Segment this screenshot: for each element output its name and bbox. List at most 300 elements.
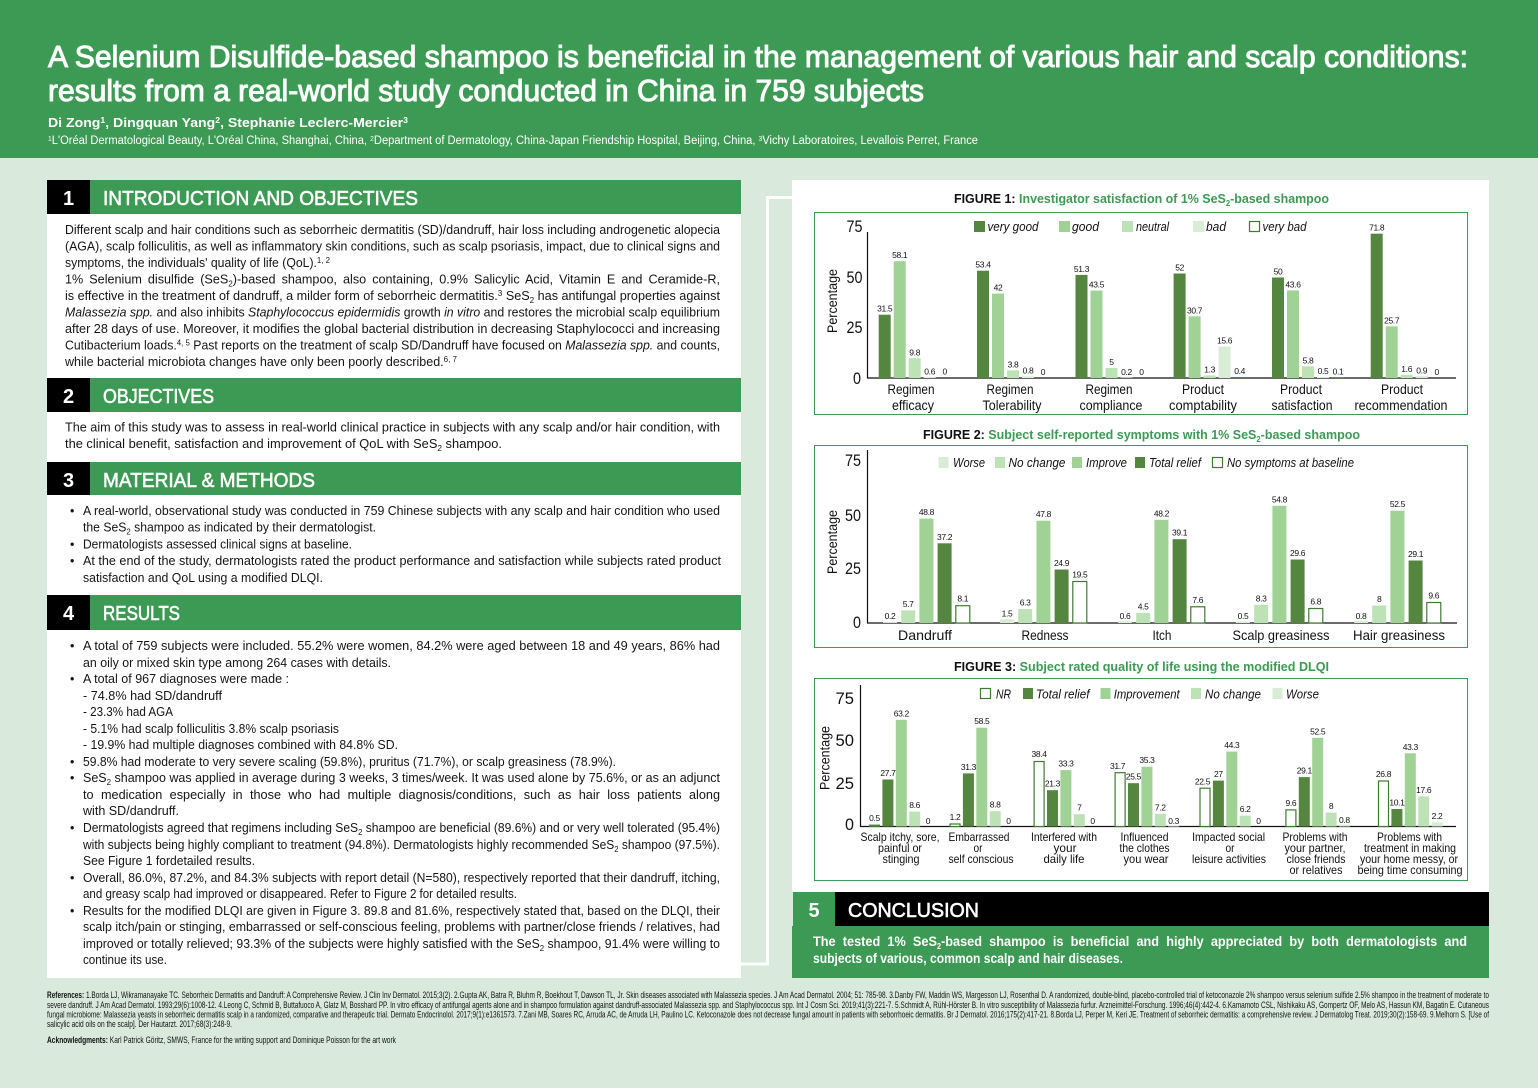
conclusion text: 2 [937, 942, 942, 951]
figure 2 title: -based shampoo [1261, 427, 1360, 442]
affiliations: L'Oréal Dermatological Beauty, L'Oréal China, Shanghai, China, [52, 135, 370, 147]
section 1 text: 1% Selenium disulfide (SeS [65, 272, 227, 286]
category labels: Product [1280, 381, 1322, 397]
section 2 text: the clinical benefit, satisfaction and improvement of QoL with SeS [65, 437, 427, 451]
product recommendation bars: 71.8 [1369, 223, 1385, 233]
category labels: comptability [1169, 397, 1237, 413]
section 3 text: shampoo as indicated by their dermatologist. [131, 520, 376, 534]
treatment bars: 26.8 [1376, 769, 1392, 779]
figure 3 title: FIGURE 3: Subject rated quality of life using the modified DLQI [954, 659, 1329, 674]
product satisfaction bars: 0.1 [1333, 366, 1344, 376]
clothes bars: 31.7 [1110, 761, 1126, 771]
legend: good [1072, 219, 1100, 234]
category labels: Scalp itchy, sore, [860, 830, 940, 844]
y axis labels: 25 [836, 774, 854, 793]
y axis labels: 0 [853, 369, 861, 388]
product compatibility bars: 15.6 [1217, 336, 1233, 346]
category labels: you wear [1124, 852, 1168, 866]
scalp greasiness bars: 8.3 [1256, 593, 1267, 603]
redness bars: 24.9 [1054, 558, 1070, 568]
legend: Improvement [1114, 686, 1181, 702]
category labels: Tolerability [982, 397, 1042, 413]
category labels: Interfered with [1031, 830, 1097, 844]
section 3 text: the SeS [83, 520, 127, 534]
social activities bars: 22.5 [1195, 776, 1211, 786]
treatment bars [1376, 742, 1443, 826]
itch bars: 48.2 [1154, 508, 1170, 518]
itch bars: 39.1 [1172, 528, 1188, 538]
section 1 text: symptoms, the individuals' quality of life (QoL). [65, 256, 322, 270]
category labels: Impacted social [1192, 830, 1265, 844]
regimen compliance bars: 51.3 [1074, 264, 1090, 274]
section 4 text: • [70, 672, 74, 686]
category labels: Regimen [1086, 381, 1132, 397]
clothes bars: 0.3 [1168, 816, 1180, 826]
affiliations: 2 [370, 136, 374, 143]
section 1 text: has antifungal properties against [534, 289, 721, 303]
section 1 text: 6, 7 [444, 355, 458, 364]
y axis labels: 0 [853, 613, 861, 632]
product recommendation bars [1369, 223, 1440, 378]
authors: , Dingquan Yang [105, 115, 215, 130]
scalp greasiness bars: 0.5 [1238, 611, 1249, 621]
section 1 text: 4, 5 [177, 338, 190, 348]
section 1 text: SeS [502, 289, 530, 303]
category labels: Regimen [986, 381, 1034, 397]
section 3 text: At the end of the study, dermatologists rated the product performance and satisfaction while subjects rated product [83, 554, 722, 568]
section 4 text: SeS [83, 771, 107, 785]
section 3 text [70, 504, 722, 585]
section 4 text: - 5.1% had scalp folliculitis 3.8% scalp psoriasis [83, 722, 339, 736]
section 1 text: 2 [228, 280, 233, 288]
scalp greasiness bars [1236, 494, 1323, 623]
product satisfaction bars: 0.5 [1318, 366, 1329, 376]
affiliations: Vichy Laboratoires, Levallois Perret, France [762, 135, 978, 147]
redness bars [1000, 509, 1088, 623]
dandruff bars: 5.7 [903, 599, 914, 609]
y axis labels [816, 689, 854, 834]
y axis labels: 50 [836, 731, 854, 750]
social activities bars: 6.2 [1240, 804, 1251, 814]
right figures panel [792, 180, 1489, 892]
y axis labels: 25 [845, 559, 861, 578]
section 4 text: to medication especially in those who had multiple diagnosis/conditions, such as hair loss patients along [83, 788, 720, 802]
section 4 text: A total of 759 subjects were included. 55.2% were women, 84.2% were aged between 18 and 49 years, 86% had [83, 639, 720, 653]
category labels: stinging [882, 852, 920, 866]
product compatibility bars [1174, 262, 1246, 378]
section 4 text: • [70, 821, 74, 835]
hair greasiness bars: 52.5 [1390, 499, 1406, 509]
section 3 text: satisfaction and QoL using a modified DLQI. [83, 571, 323, 585]
category labels: Product [1182, 381, 1224, 397]
section 4 heading: RESULTS [103, 603, 180, 625]
dandruff bars [883, 507, 970, 623]
itch bars: 4.5 [1138, 601, 1149, 611]
category labels: or [974, 841, 983, 855]
section 4 text: A total of 967 diagnoses were made : [83, 672, 289, 686]
category labels: compliance [1080, 397, 1143, 413]
conclusion panel: 5 [808, 900, 820, 922]
product recommendation bars: 0.9 [1416, 366, 1428, 376]
interfered bars: 7 [1077, 803, 1082, 813]
section 2 text: The aim of this study was to assess in real-world clinical practice in subjects with any scalp and/or hair condition, with [65, 420, 720, 434]
section 3 text: • [70, 554, 74, 568]
section 4 text: • [70, 771, 74, 785]
legend: very good [988, 219, 1039, 234]
embarrassed bars: 58.5 [974, 716, 990, 726]
section 4 text: • [70, 871, 74, 885]
section 1 text: after 28 days of use. Moreover, it modifies the global bacterial distribution in decreasing Staphylococci and increasing [65, 322, 720, 336]
section 3 text: Dermatologists assessed clinical signs at baseline. [83, 538, 352, 552]
title [48, 40, 1468, 108]
conclusion panel: CONCLUSION [848, 900, 979, 922]
regimen tolerability bars [975, 260, 1046, 378]
product satisfaction bars: 50 [1274, 266, 1283, 276]
figure 2 title: FIGURE 2: Subject self-reported symptoms with 1% SeS [923, 427, 1267, 442]
section 1 text: 3 [498, 289, 503, 298]
legend: bad [1206, 219, 1227, 234]
section 4 text: - 74.8% had SD/dandruff [83, 689, 223, 703]
category labels: Dandruff [898, 627, 952, 643]
legend: very bad [1262, 219, 1307, 234]
scalp itchy bars: 27.7 [880, 768, 896, 778]
category labels [898, 627, 1445, 643]
embarrassed bars: 8.8 [990, 800, 1001, 810]
section 1 text: 1, 2 [317, 256, 331, 265]
section 4 heading [47, 595, 741, 630]
legend: Improve [1086, 455, 1127, 470]
interfered bars: 0 [1090, 816, 1095, 826]
figure 1 title: -based shampoo [1230, 191, 1329, 206]
social activities bars: 44.3 [1224, 740, 1240, 750]
affiliations: 3 [759, 136, 762, 143]
connector line between panels [741, 198, 792, 964]
section 4 text: 2 [540, 944, 545, 953]
redness bars: 6.3 [1020, 598, 1031, 608]
section 4 text: with subjects being highly compliant to treatment (94.8%). Dermatologists highly recommended SeS [83, 838, 636, 852]
regimen tolerability bars: 53.4 [975, 260, 991, 270]
section 1 text: Malassezia spp. and counts, [565, 338, 721, 352]
hair greasiness bars: 8 [1377, 594, 1382, 604]
category labels: treatment in making [1364, 841, 1456, 855]
section 4 text: and greasy scalp had improved or disappeared. Refer to Figure 2 for detailed results. [83, 887, 517, 901]
section 3 heading: MATERIAL & METHODS [103, 470, 315, 492]
legend: No change [1008, 455, 1066, 470]
dandruff bars: 0.2 [885, 611, 896, 621]
product compatibility bars: 52 [1175, 262, 1185, 272]
scalp greasiness bars: 54.8 [1272, 494, 1288, 504]
category labels: or [1226, 841, 1235, 855]
scalp itchy bars [869, 708, 931, 826]
section 4 text: shampoo (97.5%). [619, 838, 720, 852]
regimen efficacy bars: 0 [943, 366, 948, 376]
regimen efficacy bars: 9.8 [909, 347, 921, 357]
section 2 heading: 2 [63, 386, 74, 408]
category labels [888, 381, 1448, 413]
category labels: daily life [1044, 852, 1085, 866]
section 1 text [64, 223, 721, 369]
treatment bars: 17.6 [1416, 785, 1432, 795]
clothes bars: 7.2 [1155, 802, 1166, 812]
section 4 text: Dermatologists agreed that regimens including SeS [83, 821, 368, 835]
section 3 heading: 3 [63, 470, 74, 492]
category labels: leisure activities [1192, 852, 1266, 866]
section 4 text: shampoo, 91.4% were willing to [544, 937, 720, 951]
section 4 text: • [70, 904, 74, 918]
section 3 heading [47, 462, 741, 495]
category labels: Embarrassed [948, 830, 1010, 844]
regimen tolerability bars: 0.8 [1023, 366, 1034, 376]
figure 2 bar chart [814, 446, 1468, 648]
section 4 text: 59.8% had moderate to very severe scaling (59.8%), pruritus (71.7%), or scalp greasiness (78.9%). [83, 755, 616, 769]
section 4 text: - 23.3% had AGA [83, 705, 174, 719]
category labels: your partner, [1284, 841, 1346, 855]
section 1 heading: INTRODUCTION AND OBJECTIVES [103, 188, 418, 210]
interfered bars: 21.3 [1045, 779, 1061, 789]
category labels: Product [1381, 381, 1423, 397]
interfered bars [1032, 749, 1095, 826]
acknowledgments: Acknowledgments: Karl Patrick Göritz, SMWS, France for the writing support and Dominique Poisson for the art work [47, 1035, 396, 1046]
legend: neutral [1136, 219, 1170, 234]
product satisfaction bars: 43.6 [1285, 279, 1301, 289]
hair greasiness bars: 0.8 [1356, 611, 1367, 621]
redness bars: 47.8 [1036, 509, 1052, 519]
conclusion text: The tested 1% SeS [813, 933, 950, 949]
category labels: self conscious [948, 852, 1014, 866]
treatment bars: 43.3 [1403, 742, 1418, 752]
legend: No change [1205, 686, 1261, 702]
section 3 text: • [70, 504, 74, 518]
hair greasiness bars [1354, 499, 1441, 623]
section 2 heading: OBJECTIVES [103, 386, 214, 408]
treatment bars: 2.2 [1432, 811, 1443, 821]
regimen compliance bars: 5 [1109, 357, 1114, 367]
section 4 text: shampoo was applied in average during 3 weeks, 3 times/week. It was used alone by 75.6%, or as an adjunct [111, 771, 721, 785]
figure 2 title: 2 [1256, 435, 1261, 444]
section 4 text: • [70, 755, 74, 769]
product compatibility bars: 1.3 [1204, 364, 1216, 374]
header banner [0, 0, 1538, 158]
figure 1 title: FIGURE 1: Investigator satisfaction of 1% SeS [954, 191, 1235, 206]
clothes bars [1110, 755, 1180, 826]
section 4 text: shampoo are beneficial (89.6%) and or very well tolerated (95.4%) [362, 821, 720, 835]
partner bars: 29.1 [1297, 766, 1312, 776]
section 1 text: is effective in the treatment of dandruff, a milder form of seborrheic dermatitis. [65, 289, 494, 303]
y axis labels: 75 [846, 217, 862, 236]
scalp itchy bars: 63.2 [894, 708, 909, 718]
y axis labels: 75 [845, 451, 861, 470]
clothes bars: 25.5 [1126, 772, 1142, 782]
legend [938, 455, 1354, 470]
product recommendation bars: 1.6 [1401, 364, 1413, 374]
authors: 2 [215, 116, 221, 125]
scalp itchy bars: 0.5 [869, 813, 880, 823]
category labels: satisfaction [1272, 397, 1332, 413]
section 1 heading: 1 [63, 188, 74, 210]
y axis labels: 75 [836, 689, 854, 708]
partner bars: 9.6 [1286, 798, 1297, 808]
category labels: your [1054, 841, 1077, 855]
references: salicylic acid oils on the scalp]. Der Hautarzt. 2017;68(3):248-9. [47, 1019, 232, 1030]
section 1 text: Malassezia spp. and also inhibits Staphylococcus epidermidis growth in vitro and restores the microbial scalp equilibrium [65, 306, 720, 320]
regimen compliance bars: 43.5 [1089, 280, 1105, 290]
y axis labels: 25 [846, 318, 862, 337]
partner bars: 8 [1329, 801, 1334, 811]
category labels: Scalp greasiness [1232, 627, 1330, 643]
section 3 text: 2 [126, 528, 131, 536]
dandruff bars: 8.1 [957, 594, 969, 604]
references [47, 990, 1489, 1030]
regimen efficacy bars: 58.1 [892, 250, 908, 260]
section 2 text: shampoo. [442, 437, 502, 451]
section 3 text: • [70, 538, 74, 552]
interfered bars: 38.4 [1032, 749, 1047, 759]
section 1 text: )-based shampoo, also containing, 0.9% Salicylic Acid, Vitamin E and Ceramide-R, [233, 272, 720, 286]
itch bars [1118, 508, 1205, 623]
regimen tolerability bars: 3.8 [1008, 359, 1019, 369]
product compatibility bars: 0.4 [1234, 366, 1246, 376]
conclusion panel [792, 892, 1489, 978]
category labels: Itch [1152, 627, 1172, 643]
authors: , Stephanie Leclerc-Mercier [220, 115, 403, 130]
itch bars: 0.6 [1120, 611, 1131, 621]
category labels: Redness [1022, 627, 1068, 643]
regimen efficacy bars: 31.5 [877, 304, 893, 314]
legend [974, 219, 1307, 234]
y axis labels: 50 [846, 268, 862, 287]
legend: NR [996, 686, 1011, 702]
affiliations: Department of Dermatology, China-Japan Friendship Hospital, Beijing, China, [374, 135, 759, 147]
section 4 text: scalp itch/pain or stinging, embarrassed or self-conscious feeling, problems with partner/close friends / relatives, had [83, 920, 720, 934]
category labels: Hair greasiness [1353, 627, 1445, 643]
category labels: the clothes [1120, 841, 1170, 855]
partner bars: 0.8 [1339, 815, 1350, 825]
title: results from a real-world study conducted in China in 759 subjects [48, 74, 924, 108]
partner bars [1286, 726, 1350, 826]
embarrassed bars [950, 716, 1011, 826]
product satisfaction bars [1272, 266, 1344, 378]
category labels: efficacy [892, 397, 934, 413]
embarrassed bars: 0 [1006, 816, 1011, 826]
section 4 text: Overall, 86.0%, 87.2%, and 84.3% subjects with report detail (N=580), respectively reported that their dandruff, itching, [83, 871, 720, 885]
section 4 text: Results for the modified DLQI are given in Figure 3. 89.8 and 81.6%, respectively stated that, based on the DLQI, their [83, 904, 720, 918]
y axis labels: Percentage [816, 726, 832, 790]
category labels: recommendation [1354, 397, 1448, 413]
y axis labels: 0 [845, 815, 854, 834]
regimen compliance bars: 0.2 [1121, 367, 1132, 377]
section 1 text: Past reports on the treatment of scalp SD/Dandruff have focused on [190, 338, 565, 352]
y axis labels [824, 217, 862, 388]
y axis labels [824, 451, 861, 632]
affiliations: 1 [48, 136, 52, 143]
category labels: painful or [878, 841, 922, 855]
section 4 text: improved or totally relieved; 93.3% of the subjects were highly satisfied with the SeS [83, 937, 549, 951]
product compatibility bars: 30.7 [1187, 305, 1203, 315]
section 4 text: an oily or mixed skin type among 264 cases with details. [83, 656, 391, 670]
legend: Worse [953, 455, 985, 470]
section 1 text: while bacterial microbiota changes have only been poorly described. [65, 355, 443, 369]
regimen compliance bars: 0 [1139, 367, 1144, 377]
section 4 text: 2 [614, 845, 619, 854]
scalp itchy bars: 0 [926, 816, 931, 826]
hair greasiness bars: 9.6 [1428, 590, 1440, 600]
category labels: Regimen [888, 381, 934, 397]
section 2 heading [47, 378, 741, 412]
product recommendation bars: 25.7 [1384, 315, 1400, 325]
social activities bars: 27 [1214, 769, 1223, 779]
section 4 text: continue its use. [83, 953, 167, 967]
section 3 text: A real-world, observational study was conducted in 759 Chinese subjects with any scalp and hair condition who used [83, 504, 720, 518]
section 4 text: • [70, 639, 74, 653]
y axis labels: Percentage [824, 510, 840, 574]
section 1 text: Cutibacterium loads. [65, 338, 179, 352]
scalp greasiness bars: 6.8 [1310, 596, 1322, 606]
section 4 text: 2 [358, 828, 363, 837]
hair greasiness bars: 29.1 [1408, 549, 1424, 559]
section 4 text [70, 639, 721, 967]
section 4 text: - 19.9% had multiple diagnoses combined with 84.8% SD. [83, 738, 398, 752]
legend: Total relief [1149, 455, 1202, 470]
regimen compliance bars [1074, 264, 1144, 378]
dandruff bars: 48.8 [919, 507, 935, 517]
conclusion text: -based shampoo is beneficial and highly appreciated by both dermatologists and [941, 933, 1467, 949]
legend: Total relief [1036, 686, 1091, 702]
legend: Worse [1286, 686, 1319, 702]
figure 3 bar chart [814, 678, 1468, 880]
section 4 text: 2 [107, 778, 112, 787]
category labels: close friends [1286, 852, 1346, 866]
scalp greasiness bars: 29.6 [1290, 548, 1306, 558]
section 2 text [65, 420, 720, 453]
section 4 text: with SD/dandruff. [82, 804, 179, 818]
conclusion text [813, 933, 1467, 966]
title: A Selenium Disulfide-based shampoo is beneficial in the management of various hair and scalp conditions: [48, 40, 1468, 74]
social activities bars: 0 [1256, 816, 1261, 826]
dandruff bars: 37.2 [937, 532, 953, 542]
redness bars: 19.5 [1072, 570, 1088, 580]
treatment bars: 10.1 [1389, 798, 1405, 808]
legend: No symptoms at baseline [1227, 455, 1354, 470]
y axis labels: 50 [845, 506, 861, 525]
regimen tolerability bars: 42 [994, 283, 1003, 293]
authors: 1 [100, 116, 106, 125]
redness bars: 1.5 [1002, 608, 1013, 618]
section 1 text: 2 [530, 296, 535, 305]
category labels: Influenced [1120, 830, 1168, 844]
authors: 3 [403, 116, 409, 125]
section 1 heading [47, 180, 741, 214]
legend [980, 686, 1319, 702]
figure 1 title: 2 [1226, 199, 1231, 208]
clothes bars: 35.3 [1139, 755, 1155, 765]
section 4 text: See Figure 1 fordetailed results. [83, 854, 255, 868]
section 4 heading: 4 [63, 603, 75, 625]
regimen efficacy bars: 0.6 [924, 366, 936, 376]
regimen tolerability bars: 0 [1041, 367, 1046, 377]
scalp itchy bars: 8.6 [909, 800, 921, 810]
category labels [860, 830, 1462, 877]
category labels: or relatives [1290, 863, 1342, 877]
social activities bars [1195, 740, 1261, 826]
category labels: being time consuming [1358, 863, 1462, 877]
regimen efficacy bars [877, 250, 948, 378]
category labels: Problems with [1377, 830, 1442, 844]
y axis labels: Percentage [824, 269, 840, 333]
section 1 text: Different scalp and hair conditions such as seborrheic dermatitis (SD)/dandruff, hair loss including androgenetic alopecia [65, 223, 720, 237]
category labels: Problems with [1282, 830, 1348, 844]
section 1 text: (AGA), scalp folliculitis, as well as inflammatory skin conditions, such as scalp psoriasis, impact, due to clinical signs and [65, 240, 720, 254]
product recommendation bars: 0 [1435, 367, 1440, 377]
